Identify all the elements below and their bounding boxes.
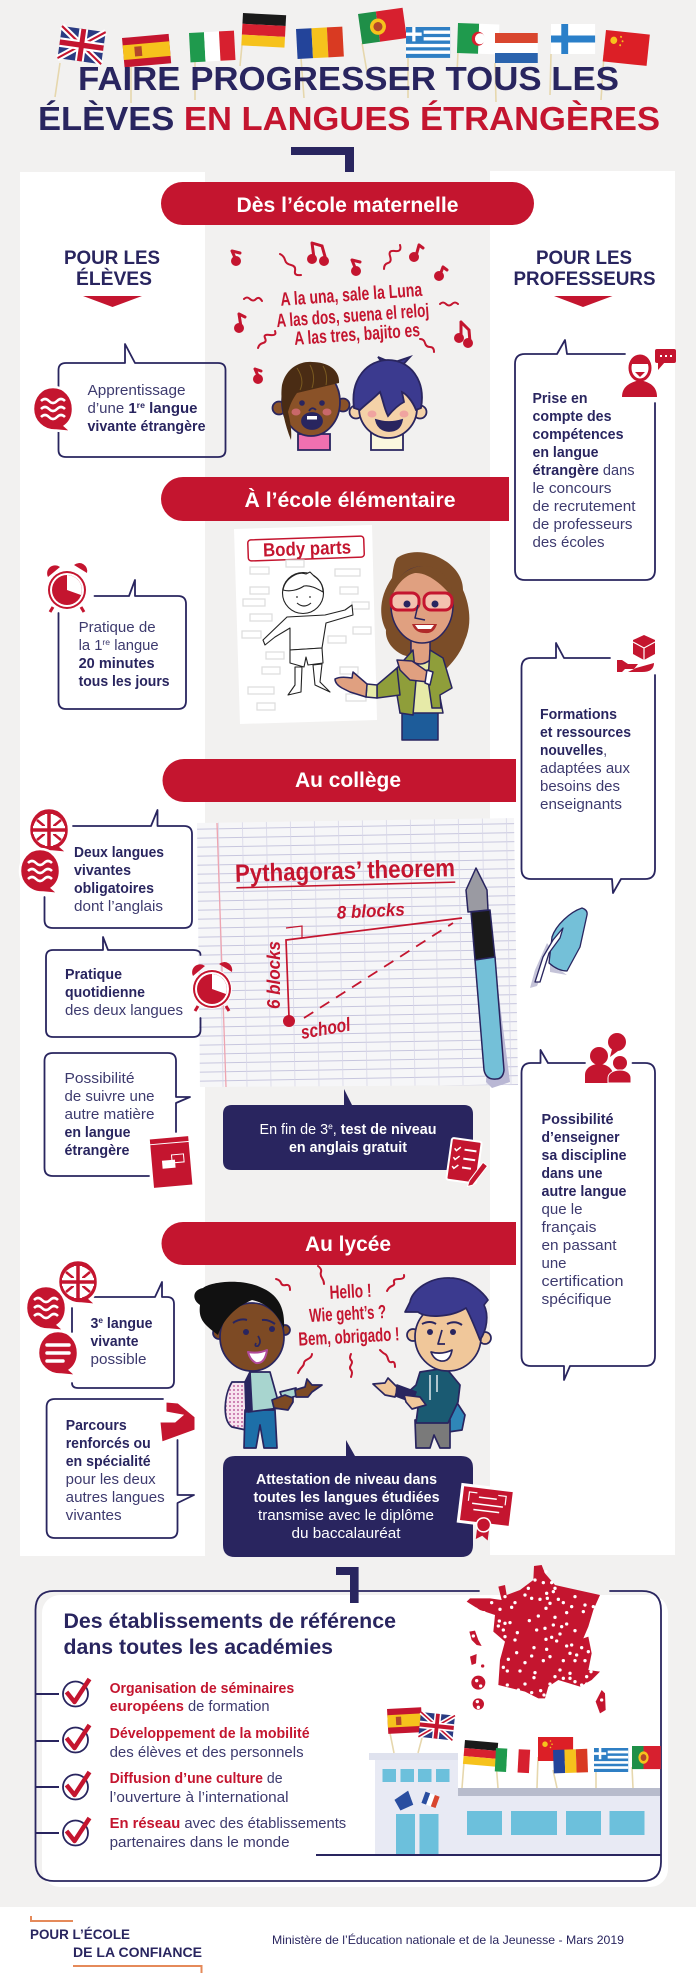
music notes xyxy=(232,243,472,382)
bubble: formations et ressources xyxy=(522,635,655,893)
text: attestation: toutes les langues étudiées xyxy=(254,1490,440,1506)
text: possibilité: autre matière xyxy=(64,1107,154,1123)
text: parcours: en spécialité xyxy=(66,1454,151,1470)
text: apprentissage: Apprentissage xyxy=(88,383,186,399)
text: apprentissage: re xyxy=(137,400,145,410)
logo: pour l'école de la confiance: POUR L’ÉCOLE xyxy=(30,1926,130,1942)
text: 8 blocks: 8 blocks xyxy=(336,899,405,923)
text: 6 blocks: 6 blocks xyxy=(264,941,284,1009)
text: possibilité: étrangère xyxy=(64,1143,130,1159)
item: mobilité xyxy=(36,1725,310,1761)
bubble: deux langues vivantes xyxy=(20,808,192,928)
text: prise en compte: Prise en xyxy=(532,391,588,407)
heading: pour les professeurs: PROFESSEURS xyxy=(514,269,656,290)
icon: UK bubble xyxy=(29,808,69,853)
text: test de niveau: test de niveau xyxy=(341,1122,436,1138)
illustration: song and music notes xyxy=(232,243,472,382)
banner: au collège: Au collège xyxy=(295,769,401,792)
overseas territories and Corsica xyxy=(469,1631,606,1713)
banner: dès l'école maternelle: Dès l’école maternelle xyxy=(236,194,458,217)
text: parcours: Parcours xyxy=(66,1418,127,1434)
heading: pour les élèves: POUR LES xyxy=(64,248,160,269)
panel: pour les élèves column xyxy=(20,172,205,1556)
text: pratique: langue xyxy=(110,638,159,654)
text: prise en compte: compte des xyxy=(532,409,612,425)
bubble: 3e langue vivante xyxy=(26,1260,174,1388)
flag: Germany xyxy=(241,13,286,48)
triangle lines xyxy=(283,918,462,1027)
text: formations: nouvelles, xyxy=(540,743,607,759)
text: 3e langue: e xyxy=(98,1315,103,1325)
flag: Greece xyxy=(406,27,450,58)
small EU and French flags xyxy=(393,1791,440,1811)
connector notch xyxy=(336,1567,359,1603)
bubble: possibilité de suivre une autre matière xyxy=(44,1053,193,1189)
text: possibilité d'enseigner: Possibilité xyxy=(542,1112,614,1128)
song lyrics xyxy=(274,280,431,351)
flag: Romania xyxy=(296,27,344,59)
item: réseau: partenaires dans le monde xyxy=(110,1835,290,1851)
text: prise en compte: étrangère dans xyxy=(532,463,635,479)
building flags xyxy=(387,1707,422,1734)
text: possibilité xyxy=(64,1071,154,1159)
banner: à l'école élémentaire: À l’école élémentaire xyxy=(244,489,456,512)
item: séminaires xyxy=(36,1679,294,1715)
text: formations xyxy=(540,707,631,813)
flag: China xyxy=(603,30,650,66)
text: prise en compte: le concours xyxy=(532,481,612,497)
worksheet title: Body parts xyxy=(263,537,351,561)
text: parcours xyxy=(66,1418,165,1524)
title: ÉLÈVES EN LANGUES ÉTRANGÈRES xyxy=(38,100,660,137)
text: pratique: la 1 xyxy=(79,638,102,654)
text: 3e langue: possible xyxy=(90,1352,146,1368)
item: réseau xyxy=(36,1816,346,1851)
song lyrics: A las dos, suena el reloj xyxy=(276,300,430,332)
text: test de niveau: En fin de 3 xyxy=(260,1122,329,1138)
illustration: dialogue text and squiggles: Wie geht’s ? xyxy=(309,1302,387,1327)
paper title: Pythagoras’ theorem xyxy=(235,854,455,888)
flags row xyxy=(57,8,650,67)
text: possibilité d'enseigner: spécifique xyxy=(542,1292,612,1308)
text: pratique quotidienne: quotidienne xyxy=(65,985,145,1001)
text: formations: adaptées aux xyxy=(540,761,631,777)
logo: pour l'école de la confiance xyxy=(30,1916,202,1973)
icon: muscle arm xyxy=(160,1402,195,1442)
banner: au lycée xyxy=(162,1222,516,1265)
banner: à l'école élémentaire xyxy=(161,477,509,521)
map of France xyxy=(467,1565,606,1713)
logo: pour l'école de la confiance: DE LA CONFIANCE xyxy=(73,1944,202,1960)
text: formations: et ressources xyxy=(540,725,631,741)
text: prise en compte xyxy=(532,391,636,551)
text: pratique: tous les jours xyxy=(79,674,170,690)
heading: pour les élèves xyxy=(64,248,160,307)
text: pratique: re xyxy=(102,637,110,647)
item: mobilité: des élèves et des personnels xyxy=(110,1745,304,1761)
text: 3e langue xyxy=(90,1315,152,1368)
text: deux langues: Deux langues xyxy=(74,845,164,861)
text: parcours: autres langues xyxy=(66,1490,165,1506)
song lyrics: A las tres, bajito es xyxy=(293,320,421,350)
banner: au collège xyxy=(162,759,516,802)
text: parcours: pour les deux xyxy=(66,1472,156,1488)
bubble: pratique de la 1re langue xyxy=(47,563,186,709)
illustration: school building with flags xyxy=(316,1707,661,1855)
text: apprentissage: d’une 1 xyxy=(88,401,136,417)
illustration: dialogue text and squiggles xyxy=(276,1266,404,1377)
banner: dès l'école maternelle xyxy=(161,182,534,225)
text: attestation xyxy=(254,1472,440,1542)
text: test de niveau xyxy=(260,1121,436,1156)
icon: alarm clock xyxy=(47,563,87,612)
flag: Netherlands xyxy=(495,33,538,63)
text: 3e langue: langue xyxy=(103,1316,152,1332)
child right xyxy=(350,357,426,450)
establishment dots xyxy=(472,1570,603,1709)
text: test de niveau: e xyxy=(328,1121,333,1131)
bubble: pratique quotidienne xyxy=(46,937,232,1037)
heading: pour les professeurs xyxy=(514,248,656,307)
flag poles xyxy=(390,1733,633,1788)
heading: dans toutes les académies xyxy=(64,1636,333,1659)
icon: language bubble xyxy=(20,849,60,894)
icon: language bubble xyxy=(26,1286,66,1331)
text: possibilité: de suivre une xyxy=(64,1089,154,1105)
text: prise en compte: des écoles xyxy=(532,535,604,551)
flag sticks xyxy=(55,43,604,103)
text: test de niveau: , xyxy=(333,1122,341,1138)
text: test de niveau: en anglais gratuit xyxy=(289,1140,407,1156)
illustration: teacher xyxy=(335,552,469,740)
title: FAIRE PROGRESSER TOUS LES xyxy=(78,60,619,97)
flag: Algeria xyxy=(457,23,499,54)
panel: établissements de référence xyxy=(36,1567,668,1887)
footer credit: Ministère de l’Éducation nationale et de la Jeunesse - Mars 2019 xyxy=(272,1932,624,1947)
bubble: apprentissage xyxy=(33,344,226,457)
icon: certificate xyxy=(455,1483,516,1543)
text: pratique quotidienne: Pratique xyxy=(65,967,122,983)
illustration: dialogue text and squiggles: Bem, obrigado ! xyxy=(298,1324,400,1351)
text: possibilité d'enseigner: certification xyxy=(542,1274,624,1290)
bubble: prise en compte des compétences xyxy=(515,340,676,580)
item: culture xyxy=(36,1771,289,1806)
icon: UK bubble xyxy=(58,1260,98,1305)
text: parcours: renforcés ou xyxy=(66,1436,151,1452)
squiggles xyxy=(244,245,458,352)
text: formations: enseignants xyxy=(540,797,622,813)
text: possibilité: en langue xyxy=(64,1125,130,1141)
child left xyxy=(272,362,350,450)
heading: Des établissements de référence xyxy=(64,1610,396,1633)
illustration: dialogue text and squiggles: Hello ! xyxy=(329,1281,372,1304)
text: pratique: Pratique de xyxy=(79,620,156,636)
text: possibilité: Possibilité xyxy=(64,1071,134,1087)
text: 3e langue: vivante xyxy=(90,1334,138,1350)
item: réseau: En réseau avec des établissements xyxy=(110,1816,346,1832)
text: possibilité d'enseigner: une xyxy=(542,1256,566,1272)
fountain pen xyxy=(466,868,510,1088)
item: séminaires: européens de formation xyxy=(110,1699,270,1715)
text: prise en compte: de professeurs xyxy=(532,517,632,533)
illustration: student right xyxy=(373,1278,491,1448)
banner: au lycée: Au lycée xyxy=(305,1233,391,1256)
item: culture: Diffusion d’une culture de xyxy=(110,1771,283,1787)
text: possibilité d'enseigner: français xyxy=(542,1220,596,1236)
text: possibilité d'enseigner: autre langue xyxy=(542,1184,626,1200)
text: deux langues: dont l’anglais xyxy=(74,899,163,915)
icon: red book xyxy=(149,1135,193,1189)
text: possibilité d'enseigner: dans une xyxy=(542,1166,602,1182)
icon: people talking xyxy=(585,1033,631,1083)
song lyrics: A la una, sale la Luna xyxy=(280,280,423,311)
text: deux langues xyxy=(74,845,164,915)
text: attestation: transmise avec le diplôme xyxy=(258,1508,434,1524)
illustration: body parts worksheet xyxy=(234,525,377,724)
text: apprentissage xyxy=(88,383,206,435)
text: attestation: Attestation de niveau dans xyxy=(256,1472,437,1488)
text: pratique xyxy=(79,620,170,690)
callout: attestation de niveau xyxy=(223,1440,516,1557)
illustration: two singing children xyxy=(272,357,426,450)
text: apprentissage: langue xyxy=(145,401,198,417)
squiggles xyxy=(276,1266,404,1377)
text: prise en compte: de recrutement xyxy=(532,499,636,515)
illustration: grid paper with geometry problem xyxy=(197,818,518,1088)
text: deux langues: vivantes xyxy=(74,863,131,879)
text: deux langues: obligatoires xyxy=(74,881,154,897)
icon: text bubble xyxy=(38,1331,78,1376)
text: prise en compte: compétences xyxy=(532,427,624,443)
heading: pour les élèves: ÉLÈVES xyxy=(76,268,152,290)
illustration: student left xyxy=(194,1282,322,1448)
heading: pour les professeurs: POUR LES xyxy=(536,248,632,269)
child drawing xyxy=(263,572,353,695)
icon: language bubble xyxy=(33,387,73,432)
text: possibilité d'enseigner xyxy=(542,1112,626,1308)
heading xyxy=(64,1610,396,1659)
flag: Italy xyxy=(189,31,235,62)
item: séminaires: Organisation de séminaires xyxy=(110,1681,294,1697)
footer band xyxy=(0,1907,696,1981)
text: prise en compte: en langue xyxy=(532,445,598,461)
text: parcours: vivantes xyxy=(66,1508,122,1524)
text: possibilité d'enseigner: que le xyxy=(542,1202,582,1218)
text: apprentissage: vivante étrangère xyxy=(88,419,206,435)
text: pratique: 20 minutes xyxy=(79,656,155,672)
item: culture: l’ouverture à l’international xyxy=(110,1790,289,1806)
label boxes xyxy=(242,560,371,710)
panel: pour les professeurs column xyxy=(490,171,675,1555)
icon: teacher speaking xyxy=(622,349,676,397)
icon: alarm clock xyxy=(192,962,232,1011)
title xyxy=(38,60,660,137)
text: pratique quotidienne xyxy=(65,967,183,1019)
flag: United Kingdom xyxy=(57,26,106,64)
text: formations: Formations xyxy=(540,707,617,723)
bubble: possibilité d'enseigner xyxy=(522,1033,655,1380)
flag: Finland xyxy=(551,24,595,54)
item: mobilité: Développement de la mobilité xyxy=(110,1726,310,1742)
bubble: parcours renforcés xyxy=(47,1399,195,1538)
building windows xyxy=(382,1769,644,1855)
callout: test de niveau xyxy=(223,1089,491,1189)
illustration: pen cap xyxy=(530,908,587,988)
text: possibilité d'enseigner: d’enseigner xyxy=(542,1130,620,1146)
text: attestation: du baccalauréat xyxy=(292,1526,400,1542)
icon: checklist and pencil xyxy=(446,1138,491,1189)
flag: Portugal xyxy=(358,8,407,44)
text: 3e langue: 3 xyxy=(90,1316,99,1332)
text: possibilité d'enseigner: en passant xyxy=(542,1238,616,1254)
icon: hand holding box xyxy=(617,635,655,672)
text: possibilité d'enseigner: sa discipline xyxy=(542,1148,626,1164)
text: pratique quotidienne: des deux langues xyxy=(65,1003,183,1019)
connector notch top xyxy=(291,147,354,172)
text: formations: besoins des xyxy=(540,779,620,795)
flag: Spain xyxy=(122,34,171,67)
text: school: school xyxy=(299,1014,353,1044)
